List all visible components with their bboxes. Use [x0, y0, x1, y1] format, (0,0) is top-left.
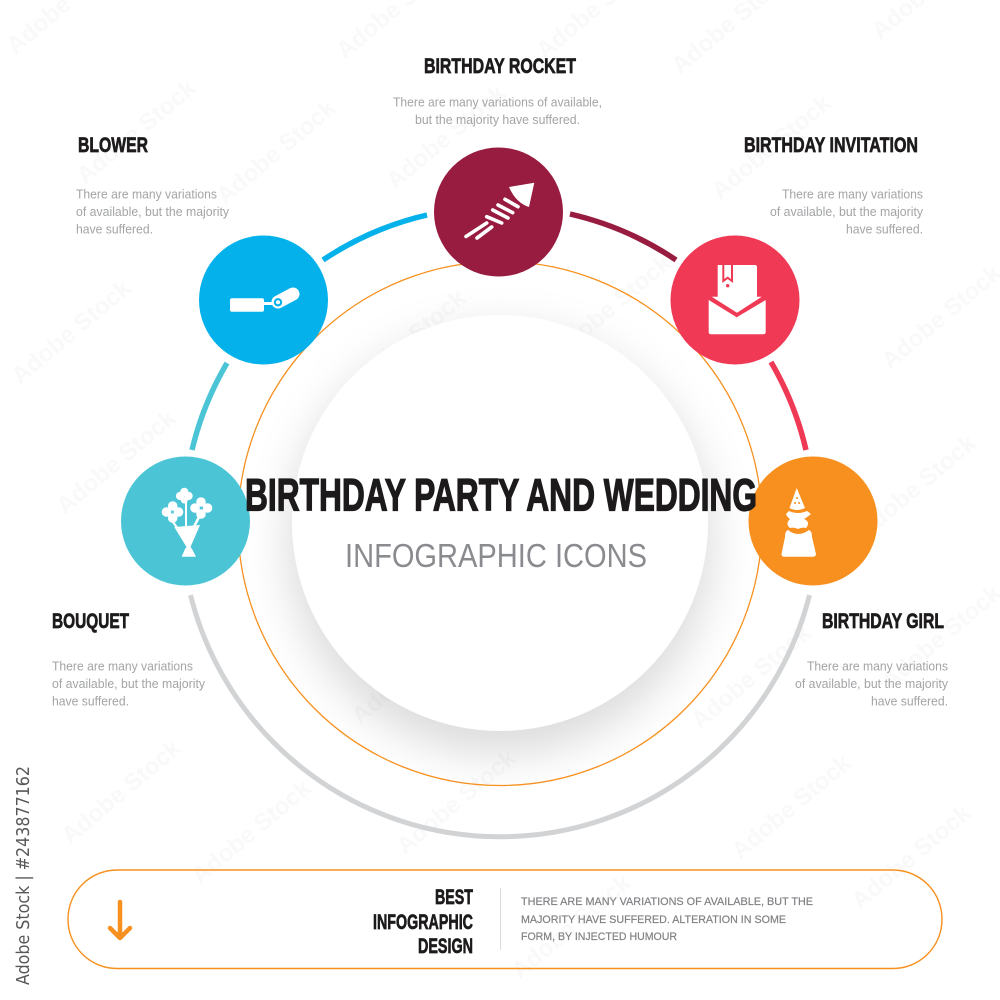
banner heading: DESIGN: [418, 935, 473, 958]
text: blower: BLOWER: [78, 134, 148, 157]
watermark: Adobe Stock: [727, 749, 857, 865]
text: bouquet: BOUQUET: [52, 610, 129, 633]
text: birthday invitation: BIRTHDAY INVITATION: [744, 134, 918, 157]
watermark: Adobe Stock: [52, 404, 182, 520]
watermark: Adobe Stock: [212, 94, 342, 210]
text: blower: There are many variations: [76, 188, 217, 202]
banner text: MAJORITY HAVE SUFFERED. ALTERATION IN SOME: [521, 914, 786, 926]
icon: rocket: [466, 183, 534, 238]
watermark: Adobe Stock: [57, 734, 187, 850]
text: birthday girl: [795, 610, 949, 708]
node: blower: [199, 236, 328, 364]
node: bouquet: [121, 456, 250, 586]
icon: down arrow: [110, 902, 130, 938]
watermark: Adobe Stock: [342, 284, 472, 400]
icon: invitation: [709, 265, 766, 334]
text: birthday rocket: but the majority have suffered.: [415, 113, 580, 127]
banner heading: INFOGRAPHIC: [373, 911, 473, 934]
bottom banner: [68, 870, 942, 968]
thin orange ring: [238, 262, 762, 786]
watermark: Adobe Stock: [382, 79, 512, 195]
stock id: Adobe Stock | #243877162: [13, 766, 34, 985]
node: birthday invitation: [670, 236, 800, 364]
text: birthday invitation: [744, 134, 924, 236]
icon: birthday girl: [782, 488, 816, 557]
text: birthday invitation: There are many variations: [782, 188, 923, 202]
text: birthday girl: have suffered.: [871, 694, 948, 708]
banner text: [521, 896, 813, 943]
text: bouquet: [52, 610, 206, 708]
arc: blue: [323, 215, 427, 260]
text: blower: have suffered.: [76, 222, 153, 236]
node: birthday girl: [748, 456, 878, 586]
title: BIRTHDAY PARTY AND WEDDING: [245, 470, 757, 520]
banner heading: [373, 886, 473, 958]
node: birthday rocket: [434, 148, 563, 276]
arc: light blue: [192, 363, 227, 450]
text: birthday girl: of available, but the majority: [795, 677, 949, 691]
text: birthday rocket: [393, 55, 602, 127]
watermark: Adobe Stock: [687, 619, 817, 735]
watermark: Adobe Stock: [187, 774, 317, 890]
watermark: Adobe Stock: [852, 429, 982, 545]
inner white circle: [292, 315, 708, 731]
text: birthday invitation: have suffered.: [846, 222, 923, 236]
banner text: THERE ARE MANY VARIATIONS OF AVAILABLE, BUT THE: [521, 896, 813, 908]
watermark: Adobe Stock: [7, 274, 137, 390]
arc: dark red: [570, 214, 676, 260]
icon: blower: [230, 294, 293, 312]
watermark: Adobe Stock: [507, 869, 637, 985]
text: bouquet: have suffered.: [52, 694, 129, 708]
watermark: Adobe Stock: [72, 74, 202, 190]
arc: red: [771, 362, 806, 450]
watermark: Adobe Stock: [707, 89, 837, 205]
text: birthday girl: BIRTHDAY GIRL: [822, 610, 944, 633]
subtitle: INFOGRAPHIC ICONS: [345, 537, 647, 574]
text: bouquet: There are many variations: [52, 660, 193, 674]
center shadow: [288, 330, 712, 754]
banner heading: BEST: [435, 886, 473, 909]
watermark: Adobe Stock: [392, 744, 522, 860]
watermark: Adobe Stock: [347, 614, 477, 730]
text: birthday rocket: BIRTHDAY ROCKET: [424, 55, 576, 78]
text: bouquet: of available, but the majority: [52, 677, 206, 691]
arc: gray bottom: [190, 595, 810, 837]
watermark: Adobe Stock: [847, 799, 977, 915]
text: blower: of available, but the majority: [76, 205, 230, 219]
icon: bouquet: [162, 488, 212, 557]
watermark: Adobe Stock: [547, 249, 677, 365]
text: birthday girl: There are many variations: [807, 660, 948, 674]
text: birthday invitation: of available, but the majority: [770, 205, 924, 219]
text: blower: [76, 134, 230, 236]
text: birthday rocket: There are many variations of available,: [393, 96, 602, 110]
banner text: FORM, BY INJECTED HUMOUR: [521, 931, 677, 943]
watermark: Adobe Stock: [552, 584, 682, 700]
